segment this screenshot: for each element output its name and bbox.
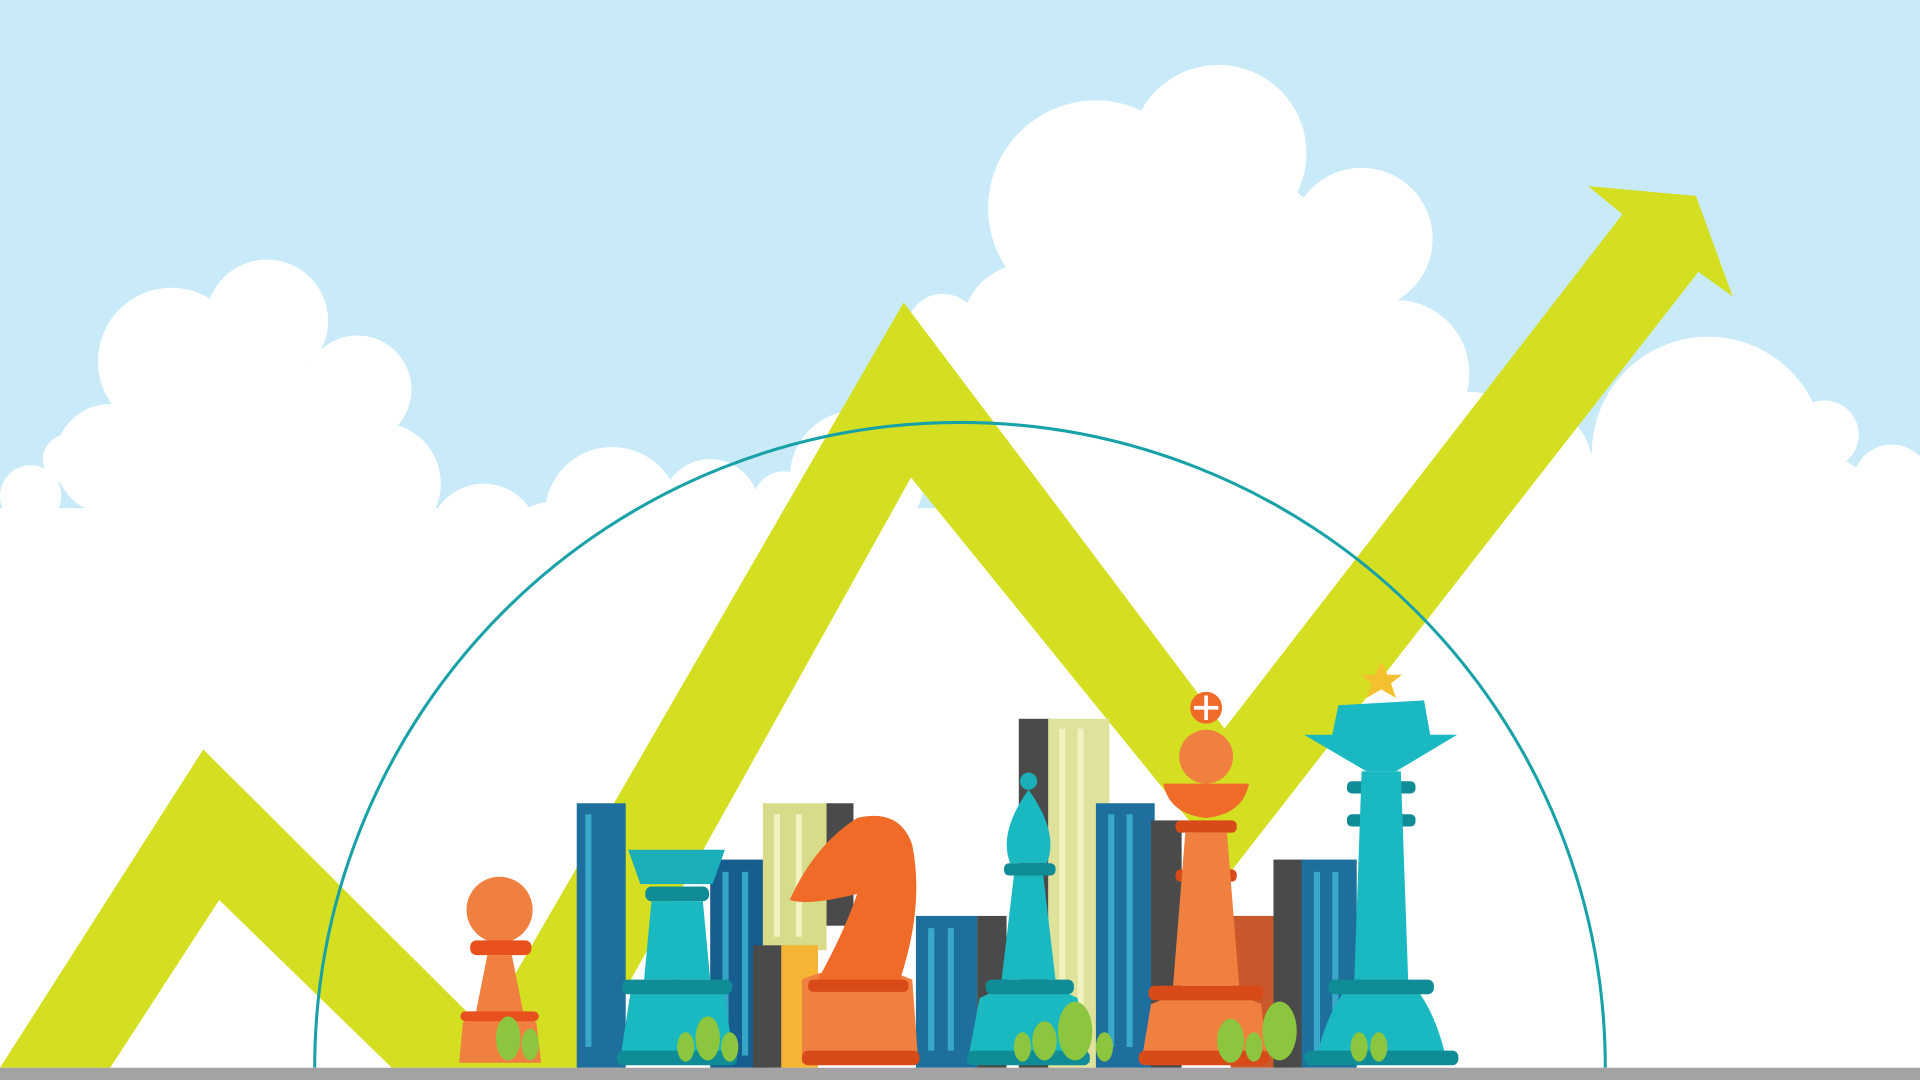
piece: knight xyxy=(790,816,920,1065)
teal arc xyxy=(315,422,1605,1068)
piece: rook xyxy=(617,850,737,1065)
ground strip xyxy=(0,1068,1920,1080)
piece: king xyxy=(1139,692,1269,1065)
arrow: rising zigzag xyxy=(0,186,1733,1068)
piece: queen xyxy=(1304,661,1458,1065)
trees xyxy=(496,1002,1387,1063)
city buildings xyxy=(577,719,1357,1068)
piece: pawn xyxy=(459,877,541,1063)
piece: bishop xyxy=(967,773,1090,1065)
